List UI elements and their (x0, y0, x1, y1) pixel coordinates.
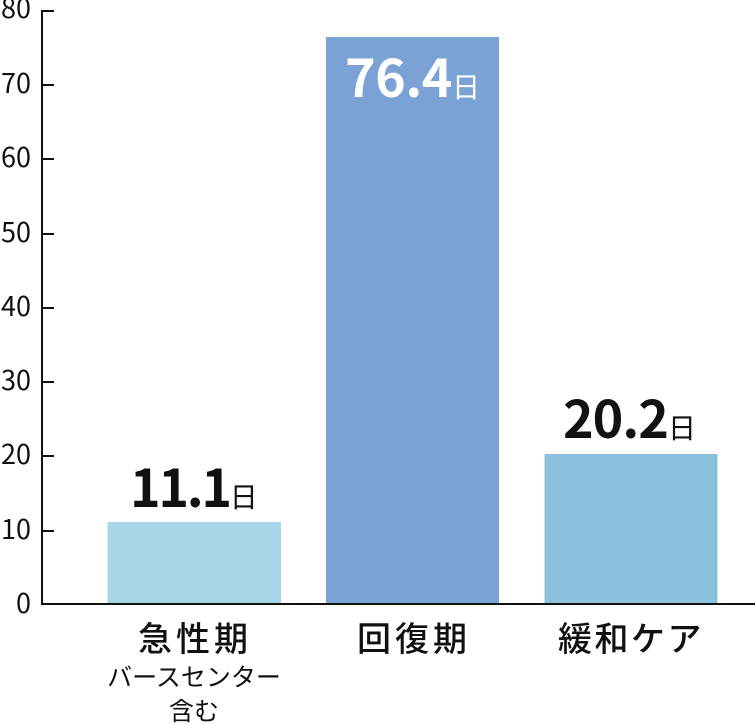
y axis: 40 (1, 285, 31, 324)
y axis: 50 (1, 211, 31, 250)
y axis: 10 (1, 508, 31, 547)
y axis: 60 (1, 136, 31, 175)
y axis: 20 (1, 433, 31, 472)
category label: palliative care: 緩和ケア (558, 612, 704, 661)
value label: palliative care: 20.2日 (563, 378, 696, 453)
bar: palliative care (544, 454, 718, 604)
value label: acute phase: 11.1日 (130, 447, 258, 522)
y axis: 30 (1, 359, 31, 398)
x axis (41, 603, 755, 605)
category label: acute phase: 急性期 (138, 612, 252, 661)
y axis: 70 (1, 62, 31, 101)
bar: acute phase (108, 522, 281, 604)
bar: recovery phase (326, 37, 499, 604)
category label: acute phase (107, 612, 281, 725)
y axis: 0 (16, 582, 31, 621)
y axis (1, 0, 54, 621)
category label: acute phase: バースセンター (107, 658, 281, 694)
category label: recovery phase: 回復期 (357, 612, 471, 661)
value label: recovery phase: 76.4日 (345, 37, 480, 112)
